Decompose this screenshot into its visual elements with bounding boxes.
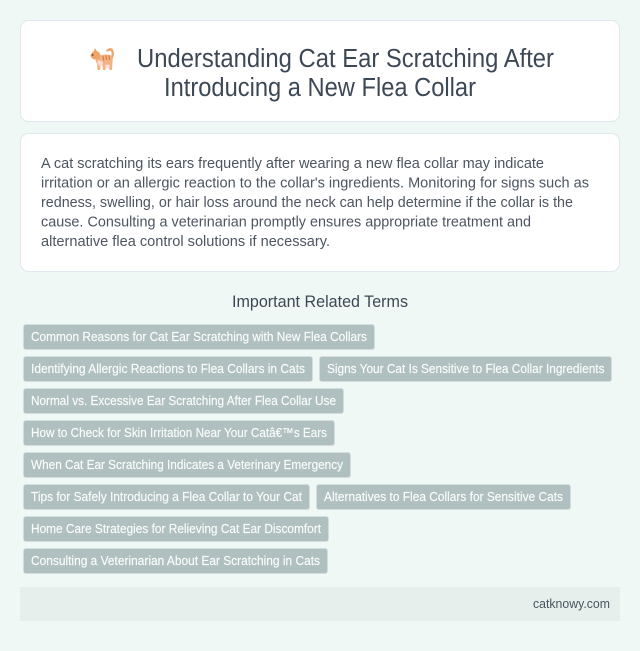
footer [20, 587, 620, 621]
text block: description [41, 155, 589, 250]
footer: catknowy.com [533, 597, 610, 611]
tag [24, 324, 374, 350]
tag: Tips for Safely Introducing a Flea Collar to Your Cat [31, 490, 302, 504]
tag [24, 516, 328, 542]
tag [24, 420, 334, 446]
panel: description [20, 134, 620, 272]
tag [24, 484, 310, 510]
tag: Home Care Strategies for Relieving Cat Ear Discomfort [31, 522, 321, 536]
text block: description: A cat scratching its ears frequently after wearing a new flea collar may indicate [41, 155, 544, 172]
text block: description: redness, swelling, or hair loss around the neck can help determine if the collar is the [41, 194, 573, 211]
tag: Normal vs. Excessive Ear Scratching After Flea Collar Use [31, 394, 336, 408]
tag [24, 356, 312, 382]
tag [320, 356, 612, 382]
heading: related terms: Important Related Terms [232, 293, 408, 311]
tag: How to Check for Skin Irritation Near Your Catâ€™s Ears [31, 426, 327, 440]
text block: description: cause. Consulting a veterinarian promptly ensures appropriate treatment and [41, 214, 531, 230]
tag: Identifying Allergic Reactions to Flea Collars in Cats [31, 362, 305, 376]
tag: Alternatives to Flea Collars for Sensitive Cats [324, 490, 563, 504]
panel: title card [20, 20, 620, 122]
title: Introducing a New Flea Collar [164, 74, 476, 102]
tag: Signs Your Cat Is Sensitive to Flea Collar Ingredients [327, 362, 604, 376]
tag: Consulting a Veterinarian About Ear Scratching in Cats [31, 554, 320, 568]
panel: related term tags [24, 324, 612, 574]
title: Understanding Cat Ear Scratching After [137, 45, 554, 73]
tag [24, 388, 344, 414]
text block: description: irritation or an allergic reaction to the collar's ingredients. Monitoring for signs such as [41, 174, 589, 192]
title [137, 45, 554, 102]
tag [24, 452, 350, 478]
tag [316, 484, 570, 510]
icon: cat [90, 48, 114, 70]
tag: Common Reasons for Cat Ear Scratching with New Flea Collars [31, 330, 367, 344]
tag [24, 548, 328, 574]
tag: When Cat Ear Scratching Indicates a Veterinary Emergency [31, 458, 344, 472]
text block: description: alternative flea control solutions if necessary. [41, 233, 330, 250]
